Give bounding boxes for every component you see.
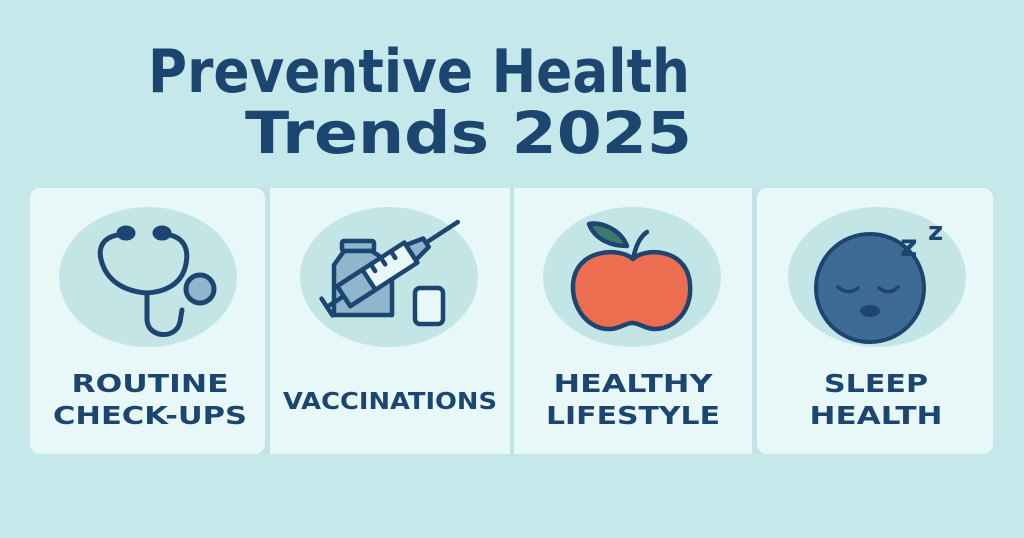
title	[148, 37, 692, 167]
label: routine check-ups: CHECK-UPS	[53, 401, 247, 430]
label: healthy lifestyle: LIFESTYLE	[546, 401, 720, 430]
icon: sleeping face: z	[900, 229, 917, 264]
panel: routine check-ups	[30, 188, 265, 454]
label: healthy lifestyle: HEALTHY	[554, 369, 714, 398]
label: sleep health: SLEEP	[824, 369, 928, 398]
icon: apple	[573, 224, 690, 329]
icon: sleeping face	[816, 217, 943, 342]
label: sleep health	[810, 369, 942, 430]
title: Trends 2025	[245, 99, 692, 167]
panel: healthy lifestyle	[514, 188, 752, 454]
label: healthy lifestyle	[546, 369, 720, 430]
label: sleep health: HEALTH	[810, 401, 942, 430]
title: Preventive Health	[148, 37, 690, 107]
panels container	[30, 187, 993, 454]
icon: sleeping face: z	[928, 217, 943, 247]
icon: syringe and vials	[320, 212, 464, 324]
panel: vaccinations	[270, 188, 510, 454]
icon: stethoscope	[100, 228, 214, 335]
panel: sleep health	[757, 188, 993, 454]
label: routine check-ups: ROUTINE	[72, 369, 228, 398]
label: vaccinations: VACCINATIONS	[283, 389, 497, 415]
label: routine check-ups	[53, 369, 247, 430]
